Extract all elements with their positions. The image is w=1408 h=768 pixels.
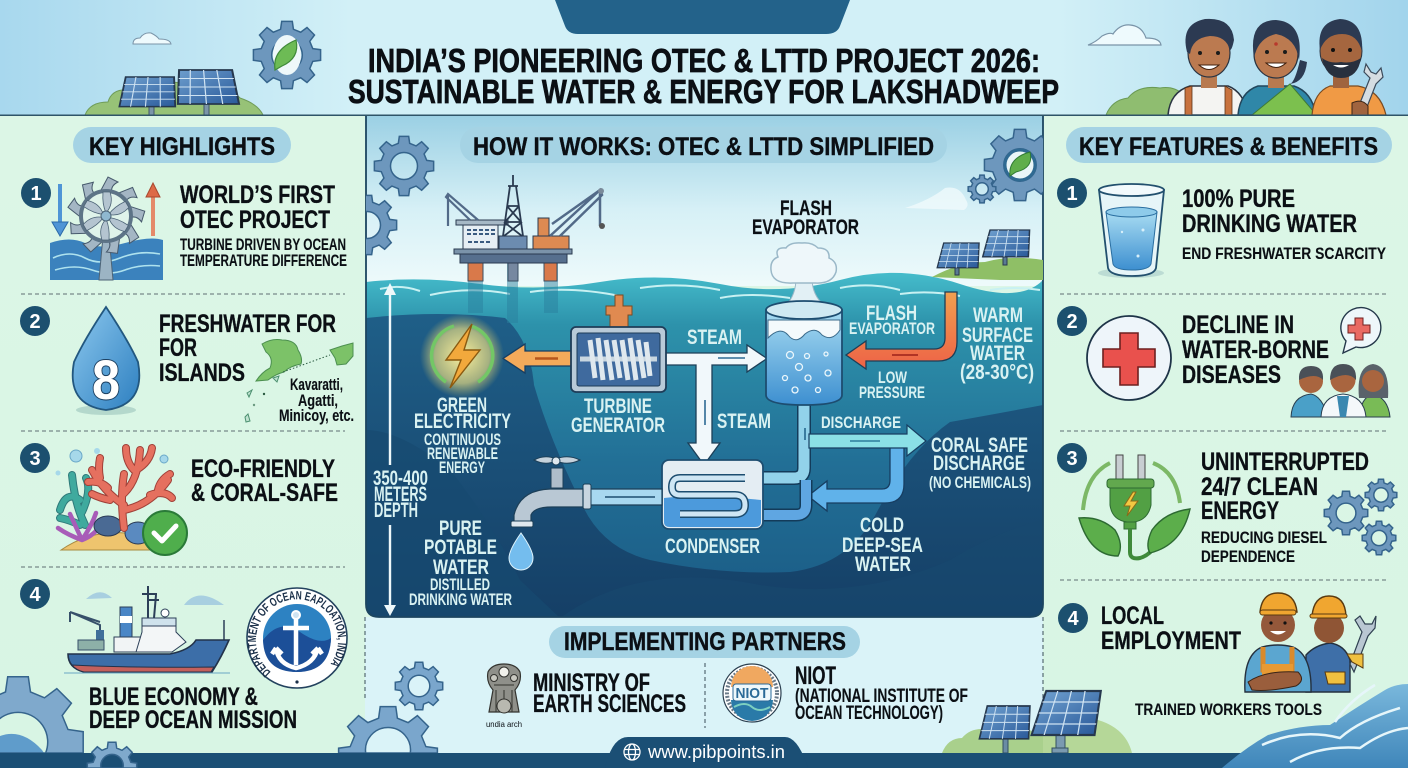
icon: water drop with 8: 8: [92, 348, 120, 411]
hill left: [85, 82, 263, 115]
discharge arrow: [809, 425, 926, 456]
flash evaporator and pressure labels: [849, 302, 935, 402]
icon: NIOT seal: [723, 664, 781, 722]
heading: key highlights: [73, 127, 291, 163]
badge 3: [1057, 443, 1087, 473]
badge 2: 2: [1066, 311, 1078, 333]
cold water label: WATER: [855, 553, 911, 576]
island names: Kavaratti,: [290, 375, 343, 394]
sea: [366, 272, 1042, 572]
heading: implementing partners: IMPLEMENTING PARTNERS: [564, 628, 846, 656]
text: DEEP OCEAN MISSION: [89, 706, 297, 734]
green electricity label: CONTINUOUS: [424, 430, 501, 449]
feature 3: clean energy: [1057, 443, 1397, 566]
partner: NIOT: [723, 662, 968, 724]
condenser label: CONDENSER: [665, 535, 760, 558]
badge 2: [1057, 306, 1087, 336]
icon: solar panels: [942, 706, 1043, 753]
pure water label: PURE: [439, 517, 482, 540]
text: ECO-FRIENDLY: [191, 455, 335, 483]
text: ISLANDS: [159, 359, 245, 387]
text: FOR: [159, 334, 197, 362]
footer tab: [605, 737, 808, 768]
panel: how it works diagram: [337, 116, 1056, 618]
text: NIOT: [795, 662, 836, 690]
icon: three gears: [1324, 479, 1397, 555]
person 1: [1168, 19, 1248, 115]
icon: water tap: [509, 457, 662, 570]
text: OCEAN TECHNOLOGY): [795, 703, 943, 724]
title: SUSTAINABLE WATER & ENERGY FOR LAKSHADWEEP: [348, 73, 1059, 110]
flash evaporator top label: [752, 197, 859, 239]
badge 1: 1: [1066, 183, 1078, 205]
waves bottom right: [1222, 684, 1408, 768]
badge 3: [20, 443, 50, 473]
badge 3: 3: [1066, 448, 1078, 470]
map of islands: [245, 340, 353, 422]
icon: gears: [339, 662, 443, 753]
electricity arrow: [503, 344, 572, 373]
text: 24/7 CLEAN: [1201, 473, 1318, 501]
depth arrow and label: 350-400: [373, 467, 428, 490]
island names: Minicoy, etc.: [279, 406, 354, 425]
warm water label: SURFACE: [962, 324, 1033, 347]
person 2: [1238, 20, 1316, 115]
decorative right solar panel: [1032, 691, 1132, 753]
badge 4: 4: [1067, 608, 1079, 630]
header band: [0, 0, 1408, 115]
badge 2: 2: [29, 311, 41, 333]
warm water label: WATER: [970, 342, 1025, 365]
icon: NIOT seal: NIOT: [736, 685, 768, 702]
badge 1: [1057, 178, 1087, 208]
text: DRINKING WATER: [1182, 210, 1357, 238]
text: [533, 669, 686, 718]
icon: gears top left: [366, 136, 434, 256]
green electricity label: ELECTRICITY: [414, 410, 511, 433]
icon: globe: [624, 744, 640, 760]
green electricity label: GREEN: [437, 394, 487, 417]
website: www.pibpoints.in: [647, 742, 785, 762]
icon: coral with check: [56, 448, 187, 555]
text: FRESHWATER FOR: [159, 310, 336, 338]
footer bar: [0, 737, 1408, 768]
icon: solar panels on island: [932, 230, 1043, 280]
text: BLUE ECONOMY &: [89, 683, 258, 711]
badge 4: [20, 579, 50, 609]
icon: national emblem: [486, 664, 522, 729]
condenser: [662, 460, 763, 529]
seal: department of ocean exploration: DEPARTMENT OF OCEAN EAPLOATION, INDIA: [248, 591, 346, 678]
warm water arrow: [846, 292, 957, 369]
flash evaporator top label: EVAPORATOR: [752, 216, 859, 239]
small gear over footer: [87, 742, 137, 768]
feature 1: drinking water: [1057, 178, 1387, 278]
turbine generator: [571, 295, 666, 392]
pure water label: [409, 517, 512, 609]
depth arrow and label: [373, 283, 428, 616]
discharge labels: DISCHARGE: [933, 452, 1025, 475]
flash evaporator and pressure labels: EVAPORATOR: [849, 319, 935, 338]
green electricity label: ENERGY: [439, 458, 485, 477]
badge 3: 3: [29, 448, 41, 470]
icon: water drop with 8: [73, 307, 139, 415]
badge 1: [21, 178, 51, 208]
turbine label: TURBINE: [584, 395, 652, 418]
text: [180, 181, 347, 270]
cold water label: [842, 514, 923, 576]
top tab: [555, 0, 850, 34]
discharge labels: CORAL SAFE: [931, 434, 1028, 457]
icon: gears with leaf top right: [967, 128, 1043, 204]
steam labels: [687, 326, 771, 433]
feature 2: water-borne disease: [1057, 306, 1390, 417]
text: [89, 683, 297, 734]
text: [1101, 602, 1241, 655]
icon: glass of water: [1098, 184, 1164, 278]
badge 4: [1058, 603, 1088, 633]
warm water label: [960, 304, 1034, 384]
icon: two workers with hard hats: [1245, 593, 1376, 692]
condenser pipes: [760, 405, 806, 515]
icon: research ship: [64, 586, 230, 673]
text: [191, 455, 338, 507]
discharge labels: [821, 413, 1031, 492]
text: LOCAL: [1101, 602, 1164, 630]
text: TURBINE DRIVEN BY OCEAN: [180, 235, 346, 254]
highlight 4: blue economy: [20, 579, 348, 734]
text: ENERGY: [1201, 497, 1279, 525]
cloud left: [133, 33, 171, 44]
text: EMPLOYMENT: [1101, 627, 1241, 655]
icon: speech bubble cross: [1341, 308, 1381, 353]
cold water label: COLD: [860, 514, 904, 537]
decorative left gear: [0, 677, 83, 753]
flash evaporator top label: FLASH: [780, 197, 832, 220]
highlight 2: freshwater for 8 islands: [20, 306, 354, 425]
warm water label: (28-30°C): [960, 361, 1034, 384]
text: (NATIONAL INSTITUTE OF: [795, 686, 968, 707]
pure water label: WATER: [433, 556, 489, 579]
pure water label: POTABLE: [424, 536, 497, 559]
text: OTEC PROJECT: [180, 206, 330, 234]
header rule: [0, 114, 1408, 116]
island names: [279, 375, 354, 425]
text: MINISTRY OF: [533, 669, 650, 697]
feature 4: local employment: [1058, 593, 1376, 719]
cloud right: [1088, 25, 1161, 45]
icon: three local people: [1168, 19, 1386, 115]
text: [1182, 185, 1387, 263]
panel: key highlights: [0, 116, 365, 734]
warm water label: WARM: [973, 304, 1023, 327]
surface ripples: [380, 285, 1040, 298]
worker 2: [1306, 643, 1350, 692]
depth arrow and label: DEPTH: [374, 499, 418, 522]
flash evaporator and pressure labels: PRESSURE: [859, 383, 925, 402]
text: [795, 662, 968, 724]
icon: ocean turbine: [50, 177, 163, 280]
text: & CORAL-SAFE: [191, 479, 338, 507]
text: DISEASES: [1182, 361, 1281, 389]
turbine label: [571, 395, 665, 437]
icon: plug with leaves: [1079, 455, 1190, 558]
caption: TRAINED WORKERS TOOLS: [1135, 700, 1322, 719]
text: [159, 310, 336, 387]
icon: community and doctor: [1291, 364, 1390, 417]
text: [1201, 448, 1369, 566]
text: 100% PURE: [1182, 185, 1295, 213]
text: REDUCING DIESEL: [1201, 528, 1327, 547]
heading: key highlights: KEY HIGHLIGHTS: [89, 133, 275, 161]
badge 1: 1: [30, 183, 42, 205]
hill right: [1106, 87, 1195, 115]
icon: national emblem: undia arch: [486, 720, 522, 729]
depth arrow and label: METERS: [374, 483, 427, 506]
steam labels: STEAM: [687, 326, 742, 349]
cold water arrow: [808, 446, 904, 511]
icon: medical cross: [1087, 316, 1171, 400]
discharge labels: (NO CHEMICALS): [929, 473, 1031, 492]
highlight 1: world's first OTEC: [21, 177, 347, 280]
text: WORLD’S FIRST: [180, 181, 335, 209]
flash evaporator and pressure labels: LOW: [878, 368, 908, 387]
discharge labels: DISCHARGE: [821, 413, 901, 432]
text: [1182, 311, 1329, 389]
badge 2: [20, 306, 50, 336]
text: DEPENDENCE: [1201, 547, 1295, 566]
flash evaporator and pressure labels: FLASH: [866, 302, 917, 325]
green electricity label: RENEWABLE: [427, 444, 498, 463]
cold water label: DEEP-SEA: [842, 534, 923, 557]
sea bed: [366, 314, 1043, 618]
flash evaporator vessel: [766, 243, 842, 405]
steam labels: STEAM: [717, 410, 771, 433]
person 3 with wrench: [1312, 19, 1386, 115]
steam arrows: [664, 345, 767, 465]
green electricity label: [414, 394, 511, 477]
text: TEMPERATURE DIFFERENCE: [180, 251, 347, 270]
gear with leaf: [253, 21, 321, 89]
solar panels left: [119, 70, 239, 115]
highlight 3: eco-friendly: [20, 443, 338, 555]
badge 4: 4: [29, 584, 41, 606]
worker 1: [1245, 645, 1311, 692]
title: [348, 42, 1059, 110]
turbine label: GENERATOR: [571, 414, 665, 437]
title: INDIA’S PIONEERING OTEC & LTTD PROJECT 2026:: [368, 42, 1040, 79]
text: EARTH SCIENCES: [533, 690, 686, 718]
pure water label: DISTILLED: [430, 575, 490, 594]
offshore platform: [446, 175, 605, 323]
panel: implementing partners: [339, 617, 1043, 753]
icon: green electricity: [420, 314, 504, 398]
partner: ministry of earth sciences: [486, 664, 686, 729]
heading: how it works: HOW IT WORKS: OTEC & LTTD SIMPLIFIED: [473, 133, 934, 161]
island names: Agatti,: [298, 391, 338, 410]
text: WATER-BORNE: [1182, 336, 1329, 364]
pure water label: DRINKING WATER: [409, 590, 512, 609]
text: DECLINE IN: [1182, 311, 1294, 339]
cloud in sky: [905, 188, 968, 210]
